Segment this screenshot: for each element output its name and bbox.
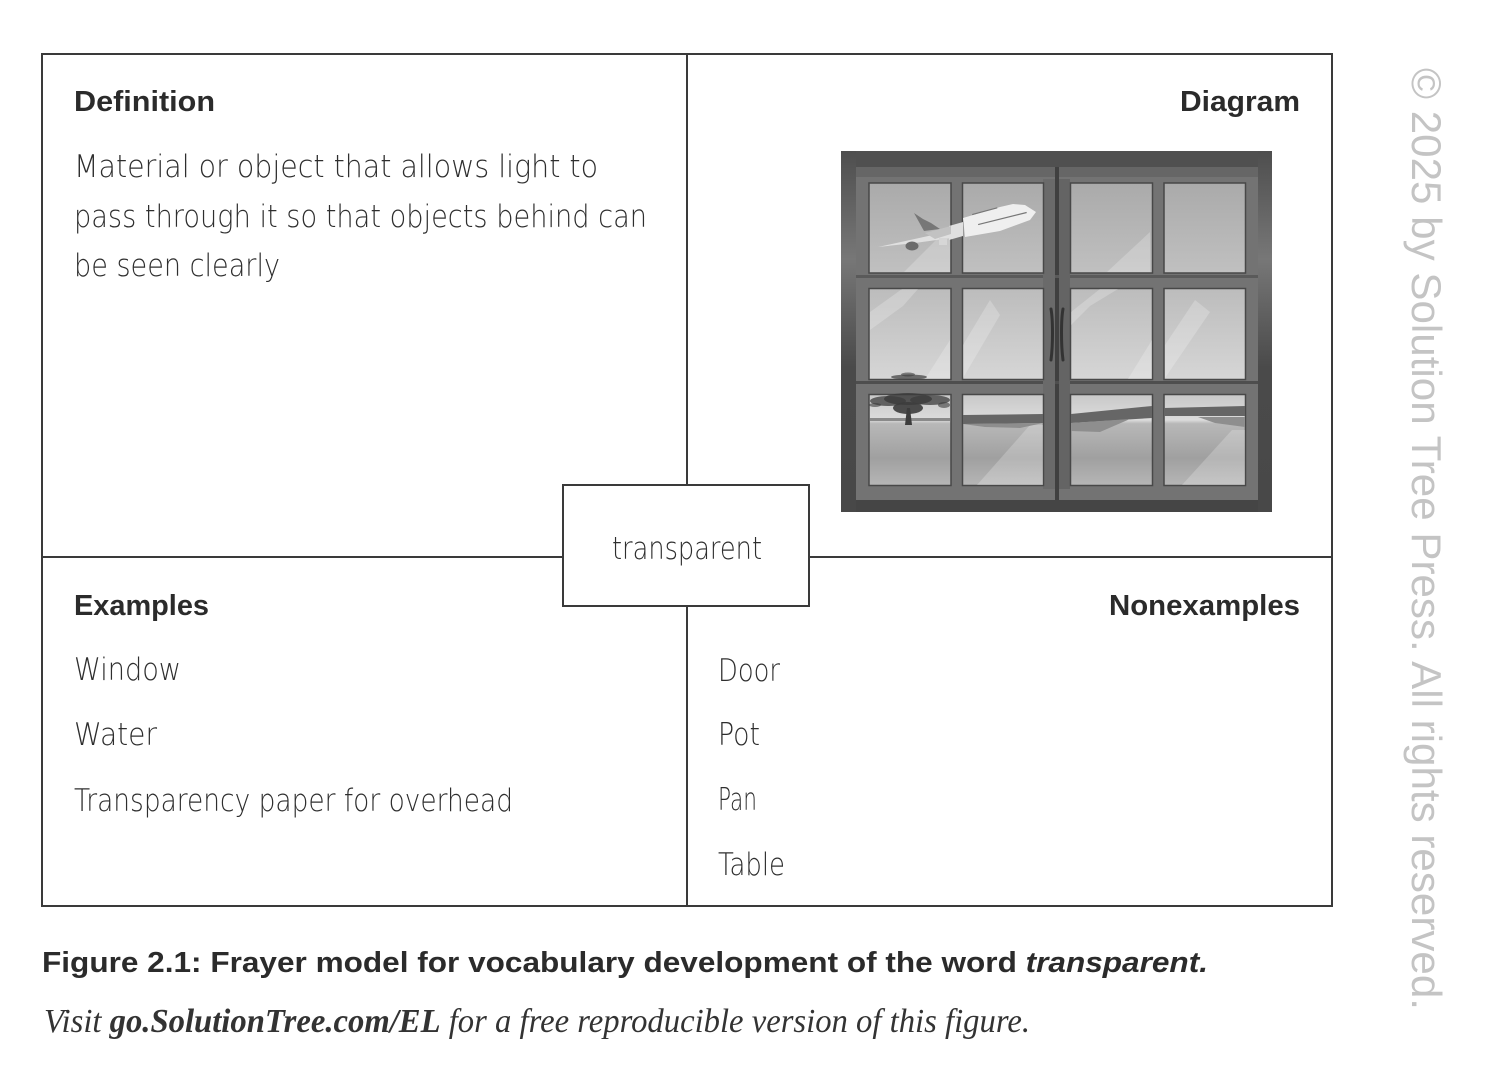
- window panes: [869, 183, 1246, 486]
- heading: diagram: Diagram: [1180, 86, 1300, 118]
- icon: airplane: [878, 204, 1036, 250]
- text: nonexamples list: Pan: [718, 782, 757, 818]
- panel: nonexamples: [718, 590, 1300, 883]
- text: definition body: Material or object that allows light to: [74, 149, 598, 185]
- panel: examples: [74, 590, 513, 819]
- text: nonexamples list: Pot: [718, 717, 760, 753]
- text: nonexamples list: Door: [718, 653, 780, 689]
- text: definition body: be seen clearly: [74, 248, 280, 284]
- icon: window handles: [1051, 309, 1063, 360]
- glass reflections: [870, 226, 1245, 485]
- text: definition body: pass through it so that objects behind can: [74, 199, 647, 235]
- center term box: transparent: [612, 531, 762, 567]
- reproducible note: Visit go.SolutionTree.com/EL for a free reproducible version of this figure.: [44, 1003, 1030, 1040]
- text: definition body: [74, 149, 647, 284]
- heading: examples: Examples: [74, 590, 209, 622]
- panel: diagram: [841, 86, 1300, 512]
- text: examples list: [74, 652, 513, 819]
- copyright watermark: © 2025 by Solution Tree Press. All rights reserved.: [1403, 68, 1450, 1010]
- text: examples list: Water: [74, 717, 157, 753]
- center term box: [563, 485, 809, 606]
- text: nonexamples list: [718, 653, 785, 883]
- heading: definition: Definition: [74, 86, 215, 118]
- text: examples list: Transparency paper for overhead: [74, 783, 513, 819]
- panel: definition: [74, 86, 647, 284]
- heading: nonexamples: Nonexamples: [1109, 590, 1300, 622]
- text: examples list: Window: [74, 652, 181, 688]
- icon: tree: [869, 372, 950, 425]
- frayer model grid: [42, 54, 1332, 906]
- figure caption: Figure 2.1: Frayer model for vocabulary development of the word transparent.: [42, 947, 1208, 979]
- icon: window illustration: [841, 151, 1272, 512]
- far shoreline: [870, 406, 1245, 432]
- text: nonexamples list: Table: [718, 847, 785, 883]
